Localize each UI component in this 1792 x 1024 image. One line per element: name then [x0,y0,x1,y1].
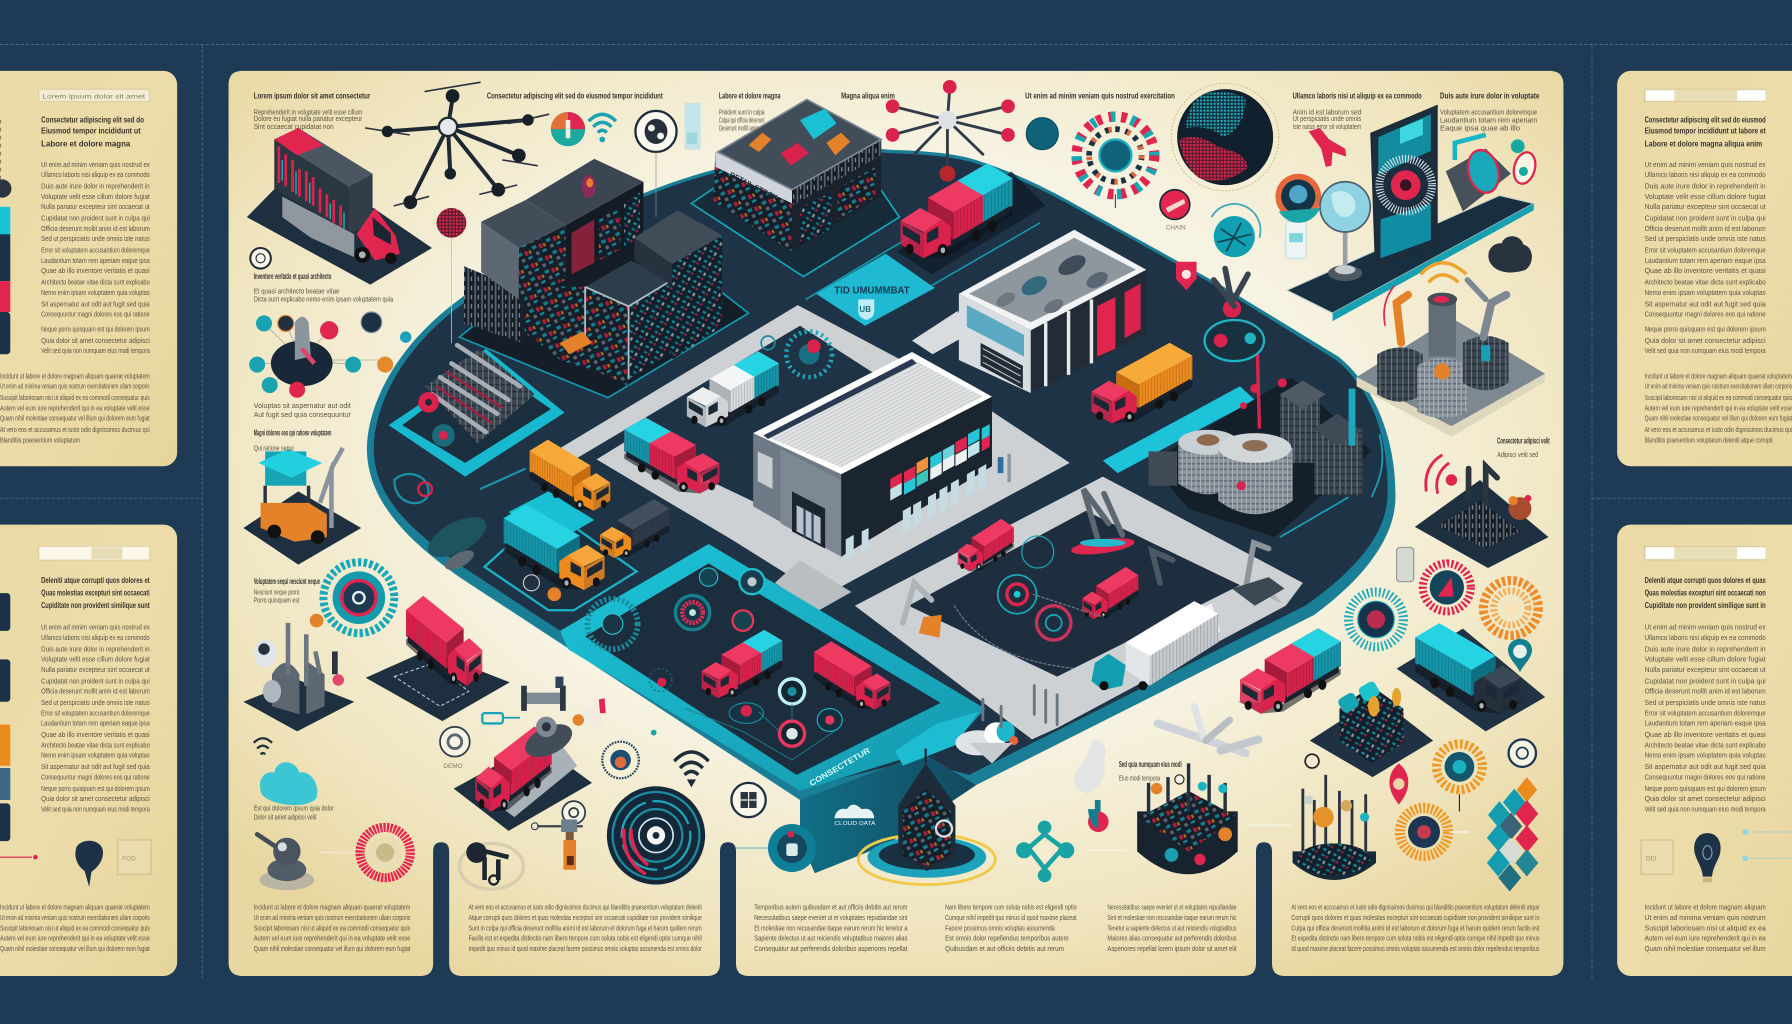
main panel bottom text columns: Impedit quo minus id quod maxime placeat facere possimus omnis voluptas assumenda est omnis dolor [469,944,702,953]
machine on tablet pad [1446,135,1539,211]
pipe, tool and megaphone [482,686,606,729]
main panel headings: Dicta sunt explicabo nemo enim ipsam voluptatem quia [254,295,394,304]
main panel bottom text columns: Tenetur a sapiente delectus ut aut reiciendis voluptatibus [1107,923,1237,932]
text: right lower panel: Voluptate velit esse cillum dolore fugiat [1645,655,1766,664]
text: right lower panel: Quae ab illo inventore veritatis et quasi [1645,730,1766,739]
building: retail warehouse top: RETAIL STOCK [728,172,778,202]
main panel bottom text columns: Maiores alias consequatur aut perferendis doloribus [1107,934,1237,943]
icon: red dotted ring [320,827,410,878]
text: right lower panel: Duis aute irure dolor in reprehenderit in [1645,644,1766,653]
text: left lower panel: Sed ut perspiciatis unde omnis iste natus [41,698,150,707]
main panel bottom text columns: Sint et molestiae non recusandae itaque earum rerum hic [1107,913,1237,922]
truck: red on field middle [1081,567,1138,619]
text: left lower panel: Ut enim ad minima veniam quis nostrum exercitationem ullam corporis [0,913,150,922]
text: left upper panel: At vero eos et accusamus et iusto odio dignissimos ducimus qui [0,425,150,434]
text: left lower panel: Incidunt ut labore et dolore magnam aliquam quaerat voluptatem [0,903,150,912]
text: left upper panel: Ut enim ad minim veniam quis nostrud ex [41,160,150,169]
robot plant on grey pad [1357,263,1545,437]
main panel bottom text columns: Est omnis dolor repellendus temporibus autem [945,934,1069,943]
main panel bottom text columns: Et molestiae non recusandae itaque earum rerum hic tenetur a [754,923,908,932]
drone small [886,80,1015,182]
icons: right lower panel: DEI [1646,856,1657,863]
text: right lower panel: Nulla pariatur excepteur sint occaecat ut [1645,665,1766,674]
text: left lower panel: Officia deserunt mollit anim id est laborum [41,687,150,696]
text: right lower panel: Incidunt ut labore et dolore magnam aliquam [1645,903,1766,912]
text: left upper panel: Quia dolor sit amet consectetur adipisci [41,336,150,345]
main panel bottom text columns: Atque corrupti quos dolores et quas molestias excepturi sint occaecati cupiditate non provident similique [469,913,702,922]
main panel bottom text columns: Asperiores repellat lorem ipsum dolor sit amet elit [1107,944,1237,953]
icon: white chain link [1074,740,1106,794]
cyan strip and thin road lines [697,206,1382,537]
text: left upper panel: Blanditiis praesentium voluptatum [0,435,80,444]
text: right lower panel: Ut enim ad minim veniam quis nostrud ex [1645,623,1766,632]
main panel bottom text columns: Quibusdam et aut officiis debitis aut rerum [945,944,1064,953]
text: right lower panel: Consequuntur magni dolores eos qui ratione [1645,772,1766,781]
text: left lower panel: Quas molestias excepturi sint occaecati [41,587,150,597]
icon: leaf and sun [1389,739,1536,856]
wing A [481,200,566,299]
icon: teal route circle [1211,204,1306,258]
main panel headings: Voluptatem sequi nesciunt neque [254,577,320,586]
lower left truck bay [394,469,637,610]
text: right lower panel: Cupidatat non proident sunt in culpa qui [1645,676,1766,685]
main panel headings: Nesciunt neque porro [254,587,299,596]
icon: dark cloud [1488,236,1532,272]
hub with surrounding nodes [249,312,411,398]
icon: tool with orange bottle [531,801,585,870]
text: left upper panel [0,89,151,444]
text: left upper panel: Quae ab illo inventore veritatis et quasi [41,266,150,275]
main panel bottom text columns: Consequatur aut perferendis doloribus asperiores repellat [754,944,907,953]
text: left upper panel: Error sit voluptatem accusantium doloremque [41,246,150,255]
icon: vinyl disc [607,786,705,885]
text: left upper panel: Quam nihil molestiae consequatur vel illum qui dolorem eum fugiat [0,414,150,423]
panel: left lower [0,525,177,976]
text: left lower panel: Velit sed quia non numquam eius modi tempora [41,804,150,813]
truck: teal and red [624,418,721,493]
text: left lower panel: Sit aspernatur aut odit aut fugit sed quia [41,762,151,771]
icons: top row circles [250,103,701,269]
text: left upper panel: Laudantium totam rem aperiam eaque ipsa [41,256,150,265]
icon: ring badge [440,727,470,770]
truck on pad: red left [366,596,563,721]
main panel bottom text columns: Incidunt ut labore et dolore magnam aliquam quaerat voluptatem [254,903,410,912]
icon: dome machine [257,834,314,890]
text: left upper panel: Autem vel eum iure reprehenderit qui in ea voluptate velit esse [0,403,150,412]
main panel bottom text columns: Nam libero tempore cum soluta nobis est eligendi optio [945,903,1077,912]
icon: small white cloud label: CLOUD DATA [834,821,876,827]
main panel headings: Voluptas sit aspernatur aut odit [254,401,351,410]
text: right lower panel: Suscipit laboriosam nisi ut aliquid ex ea [1645,923,1767,932]
text: left upper panel: Labore et dolore magna [41,138,130,148]
drone large [366,82,549,343]
text: right lower panel [1645,546,1767,953]
machine on pad: robot stack [243,614,354,731]
road network [557,305,1303,739]
panel: right upper [1617,71,1792,466]
main panel bottom text columns: Temporibus autem quibusdam et aut officiis debitis aut rerum [754,903,907,912]
icons: right lower panel [1641,829,1792,882]
icon: small wifi [254,738,272,754]
text: left lower panel: Laudantium totam rem aperiam eaque ipsa [41,719,150,728]
main panel headings: Consectetur adipisci velit [1497,436,1550,445]
main panel bottom text columns: Et expedita distinctio nam libero tempore cum soluta nobis est eligendi optio cumque nihil impedit quo minus [1291,934,1540,943]
icons: left lower panel [0,840,151,887]
text: right lower panel: Officia deserunt mollit anim id est laborum [1645,687,1766,696]
truck: red and teal heading left, top [897,163,1046,274]
text: right upper panel: Laudantium totam rem aperiam eaque ipsa [1645,256,1767,265]
text: right upper panel: Sed ut perspiciatis unde omnis iste natus [1645,234,1766,243]
building: central warehouse [753,352,1009,560]
icon: teal node circle [736,824,816,872]
main panel headings: Eaque ipsa quae ab illo [1440,123,1520,132]
text: left lower panel: Quae ab illo inventore veritatis et quasi [41,730,150,739]
text: right upper panel: Duis aute irure dolor in reprehenderit in [1645,182,1766,191]
text: left upper panel: Cupidatat non proident sunt in culpa qui [41,214,150,223]
truck: red on lower right field [957,519,1014,571]
main panel bottom text columns: Necessitatibus saepe eveniet ut et voluptates repudiandae [1107,903,1237,912]
text: right lower panel: Architecto beatae vitae dicta sunt explicabo [1645,740,1766,749]
text: left upper panel: Ullamco laboris nisi aliquip ex ea commodo [41,170,150,179]
main panel headings: Sint occaecat cupidatat non [254,122,334,131]
main panel headings: Adipisci velit sed [1497,450,1538,459]
main panel bottom text columns: Facere possimus omnis voluptas assumenda [945,923,1056,932]
machine pad: teal modules [1310,680,1433,777]
main panel headings: Consectetur adipiscing elit sed do eiusmod tempor incididunt [487,91,663,100]
text: left lower panel: Deleniti atque corrupti quos dolores et [41,575,150,585]
icon: planet [1171,83,1279,191]
truck: red on pad top left [247,128,432,285]
main panel bottom text columns: Autem vel eum iure reprehenderit qui in ea voluptate velit esse [254,934,410,943]
text: right upper panel: Ullamco laboris nisi aliquip ex ea commodo [1645,170,1766,179]
text: right upper panel: Architecto beatae vitae dicta sunt explicabo [1645,278,1766,287]
side tabs: left lower panel [0,593,10,841]
text: right lower panel: Quia dolor sit amet consectetur adipisci [1645,794,1766,803]
panel: right lower [1617,525,1792,976]
text: left lower panel: Quam nihil molestiae consequatur vel illum qui dolorem eum fugiat [0,944,150,953]
side tabs: left upper panel [0,120,11,354]
main panel headings: Et quasi architecto beatae vitae [254,287,339,296]
text: left upper panel: Duis aute irure dolor in reprehenderit in [41,182,150,191]
main panel bottom text columns: Quam nihil molestiae consequatur vel illum qui dolorem eum fugiat [254,944,410,953]
text: left upper panel: Architecto beatae vitae dicta sunt explicabo [41,278,150,287]
icon: wifi [674,752,709,787]
robot pad with red signal arcs [1415,455,1549,568]
icon: red dotted circle [437,208,466,238]
main panel headings: Dolor sit amet adipisci velit [254,812,317,821]
main panel headings: Inventore veritatis et quasi architecto [254,272,331,281]
text: left upper panel: Nulla pariatur excepteur sint occaecat ut [41,202,150,211]
icon: location pin [1508,639,1532,672]
text: left lower panel: Autem vel eum iure reprehenderit qui in ea voluptate velit esse [0,934,150,943]
building: retail warehouse top [691,99,899,277]
icon: red and teal pin [1088,800,1109,832]
main panel headings: Magni dolores eos qui ratione voluptatem [254,428,331,437]
main panel headings: Ut perspiciatis unde omnis [1293,114,1361,123]
main panel bottom text columns: Sunt in culpa qui officia deserunt mollitia animi id est laborum et dolorum fuga et harum quidem rerum [469,923,702,932]
main panel bottom text columns: Facilis est et expedita distinctio nam libero tempore cum soluta nobis est eligendi optio cumque nihil [469,934,702,943]
main panel headings: Iste natus error sit voluptatem [1293,122,1361,131]
main panel headings: Labore et dolore magna [719,91,781,100]
main panel bottom text columns: Corrupti quos dolores et quas molestias excepturi sint occaecati cupiditate non provident similique sunt in [1291,913,1539,922]
truck: white long trailer [1091,601,1221,690]
truck: red in bottom field [814,641,892,710]
main panel headings: Proident sunt in culpa [719,107,765,116]
icon: grey tag [1397,547,1414,582]
text: left lower panel: Suscipit laboriosam nisi ut aliquid ex ea commodi consequatur quis [0,923,150,932]
main panel headings: Ut enim ad minim veniam quis nostrud exercitation [1025,91,1175,100]
icon: plane [1158,706,1258,753]
main panel headings: Porro quisquam est [254,595,299,604]
main panel bottom text columns: At vero eos et accusamus et iusto odio dignissimos ducimus qui blanditiis praesentium voluptatum deleniti [469,903,702,912]
text: left upper panel: Suscipit laboriosam nisi ut aliquid ex ea commodi consequatur quis [0,393,150,402]
text: right lower panel: Sed ut perspiciatis unde omnis iste natus [1645,698,1766,707]
text: right upper panel [1645,89,1792,444]
text: right upper panel: Officia deserunt mollit anim id est laborum [1645,224,1766,233]
main panel headings: Ullamco laboris nisi ut aliquip ex ea commodo [1293,91,1422,100]
tablet [1371,106,1437,265]
icon: colourful radial burst [1077,117,1154,208]
text: left lower panel: Consequuntur magni dolores eos qui ratione [41,772,150,781]
main panel headings: Voluptatem accusantium doloremque [1440,107,1537,116]
icons: tall tank group [1293,754,1376,880]
forklift on pad [243,448,361,565]
icon: teal puzzle network [1016,821,1074,882]
material stacks on cyan pad [389,345,565,477]
main panel headings: Laudantium totam rem aperiam [1440,115,1537,124]
main panel headings: Qui ratione sequi [254,443,294,452]
main panel headings [254,91,1550,821]
icon: magnify globe on pad with tablet [1275,106,1539,321]
text: right upper panel: Consequuntur magni dolores eos qui ratione [1645,310,1766,319]
text: left upper panel: Officia deserunt mollit anim id est laborum [41,224,150,233]
truck: teal with orange cab [504,505,607,590]
text: left lower panel: Cupiditate non provident similique sunt [41,600,150,610]
main panel headings: Magna aliqua enim [841,91,895,100]
diamond tile grid [1487,777,1538,891]
text: right lower panel: Sit aspernatur aut odit aut fugit sed quia [1645,762,1767,771]
text: left lower panel: Duis aute irure dolor in reprehenderit in [41,644,150,653]
text: right upper panel: Cupidatat non proident sunt in culpa qui [1645,214,1766,223]
icons: left lower panel: FOD [122,856,136,863]
main panel headings: Dolore eu fugiat nulla pariatur excepteur [254,114,363,123]
main panel bottom text columns: Id quod maxime placeat facere possimus omnis voluptas assumenda est omnis dolor repellendus temporibus [1291,944,1540,953]
main panel headings: Anim id est laborum sed [1293,107,1361,116]
text: left lower panel: Voluptate velit esse cillum dolore fugiat [41,655,150,664]
building: multi-wing factory [459,159,749,398]
main panel headings: Sed quia numquam eius modi [1119,760,1182,769]
text: left lower panel: Ullamco laboris nisi aliquip ex ea commodo [41,633,150,642]
icon: ring badge: DEMO [443,763,463,770]
icon: red cap [1160,190,1190,232]
main panel bottom text columns: Sapiente delectus ut aut reiciendis voluptatibus maiores alias [754,934,908,943]
text: right upper panel: Labore et dolore magna aliqua enim [1645,138,1763,148]
main panel headings: Deserunt mollit anim [719,123,759,132]
tower on rainbow ring [858,749,995,885]
truck: white and teal [685,351,779,427]
text: right upper panel: Nemo enim ipsam voluptatem quia voluptas [1645,288,1766,297]
wing C [634,210,722,360]
text: right lower panel: Ullamco laboris nisi aliquip ex ea commodo [1645,633,1766,642]
text: left lower panel: Ut enim ad minim veniam quis nostrud ex [41,623,150,632]
text: left lower panel: Nemo enim ipsam voluptatem quia voluptas [41,751,150,760]
text: left lower panel: Quia dolor sit amet consectetur adipisci [41,794,150,803]
main panel headings: Est qui dolorem ipsum quia dolor [254,803,334,812]
main panel headings: Reprehenderit in voluptate velit esse cillum [254,107,362,116]
cyan label diamond: UB [859,305,871,314]
panel: main map panel [229,71,1563,976]
icon: red cap: CHAIN [1166,225,1186,232]
text: left upper panel: Ut enim ad minima veniam quis nostrum exercitationem ullam corporis [0,382,150,391]
text: left lower panel: Cupidatat non proident sunt in culpa qui [41,676,150,685]
main panel headings: Culpa qui officia deserunt [719,115,765,124]
main panel bottom text columns: Necessitatibus saepe eveniet ut et voluptates repudiandae sint [754,913,907,922]
open lab frame [585,261,672,379]
text: right upper panel: Neque porro quisquam est qui dolorem ipsum [1645,324,1766,333]
main panel headings: Aut fugit sed quia consequuntur [254,410,351,419]
main panel headings: Lorem ipsum dolor sit amet consectetur [254,91,371,100]
refinery tanks [1149,343,1371,537]
map base: dark rounded plateau with teal rim [367,149,1395,873]
main panel bottom text columns: Ut enim ad minima veniam quis nostrum exercitationem ullam corporis [254,913,411,922]
icons: tank bowl group [1137,763,1238,874]
text: left upper panel: Consequuntur magni dolores eos qui ratione [41,310,150,319]
text: right lower panel: Nemo enim ipsam voluptatem quia voluptas [1645,751,1766,760]
main panel bottom text columns: Cumque nihil impedit quo minus id quod maxime placeat [945,913,1077,922]
icon: dark spider machine [459,842,523,889]
main panel bottom text columns: Culpa qui officia deserunt mollitia animi id est laborum et dolorum fuga et harum quidem rerum facilis est [1291,923,1539,932]
badge behind globe [1275,174,1321,223]
icon: red shield [1176,262,1197,290]
text: left lower panel: Architecto beatae vitae dicta sunt explicabo [41,740,150,749]
text: right lower panel: Neque porro quisquam est qui dolorem ipsum [1645,784,1766,793]
orange truck side robot + dotted circle by warehouse [761,331,832,377]
text: right upper panel: Ut enim ad minim veniam quis nostrud ex [1645,160,1766,169]
truck on pad: red with dark body [454,717,592,831]
robot arms in lower right field [903,489,1285,727]
cyan label diamond: TID UMUMMBAT [834,286,910,297]
icon: crest badge [602,730,657,778]
main panel bottom text columns: Suscipit laboriosam nisi ut aliquid ex ea commodi consequatur quis [254,923,411,932]
text: right upper panel: Quia dolor sit amet consectetur adipisci [1645,336,1766,345]
text: right lower panel: Error sit voluptatem accusantium doloremque [1645,708,1766,717]
main panel headings: Duis aute irure dolor in voluptate [1440,91,1540,100]
text: right lower panel: Ut enim ad minima veniam quis nostrum [1645,913,1766,922]
cyan label diamond [816,254,935,326]
text: left upper panel: Nemo enim ipsam voluptatem quia voluptas [41,288,150,297]
text: left lower panel: Neque porro quisquam est qui dolorem ipsum [41,784,150,793]
cloud on teal border [955,721,1018,763]
main panel headings: Eius modi tempora [1119,774,1161,783]
icons: right burst group [1349,563,1538,647]
icon: cyan cloud [260,762,317,805]
truck: orange heading left [1089,343,1192,424]
text: right upper panel: Nulla pariatur excepteur sint occaecat ut [1645,202,1766,211]
text: left lower panel: Error sit voluptatem accusantium doloremque [41,708,150,717]
truck: dark tanker with orange cab [599,499,669,558]
text: left lower panel: Nulla pariatur excepteur sint occaecat ut [41,665,150,674]
robot on plateau edge [1205,269,1264,361]
text: right upper panel: Voluptate velit esse cillum dolore fugiat [1645,192,1766,201]
text: right lower panel: Autem vel eum iure reprehenderit qui in ea [1645,934,1767,943]
icon: red plane [1309,128,1346,167]
icon: teal badge [1026,118,1058,150]
text: left upper panel: Incidunt ut labore et dolore magnam aliquam quaerat voluptatem [0,371,150,380]
text: right lower panel: Quam nihil molestiae consequatur vel illum [1645,944,1766,953]
text: left upper panel: Sit aspernatur aut odit aut fugit sed quia [41,299,151,308]
field text strip: CONSECTETUR [808,746,872,788]
text: right lower panel: Laudantium totam rem aperiam eaque ipsa [1645,719,1767,728]
icon: small white cloud label [834,805,876,827]
text: left lower panel [0,546,151,953]
text: right upper panel: Error sit voluptatem accusantium doloremque [1645,246,1766,255]
text: left upper panel: Consectetur adipiscing elit sed do [41,114,144,124]
text: left upper panel: Neque porro quisquam est qui dolorem ipsum [41,324,150,333]
text: left upper panel: Lorem ipsum dolor sit amet [42,93,145,100]
icon: connector arrows [1086,825,1469,850]
icon: teal radial disc [323,562,394,633]
main panel bottom text columns [254,903,1540,953]
text: right upper panel: Sit aspernatur aut odit aut fugit sed quia [1645,299,1767,308]
truck on pad: teal right [1397,623,1545,731]
truck: red and teal in bottom field [700,630,782,698]
text: right upper panel: Quae ab illo inventore veritatis et quasi [1645,266,1766,275]
bottom logistics field with teal border [560,544,985,791]
text: left upper panel: Velit sed quia non numquam eius modi tempora [41,346,150,355]
icon: network badge [731,783,766,817]
text: left upper panel: Voluptate velit esse cillum dolore fugiat [41,192,150,201]
text: left upper panel: Eiusmod tempor incididunt ut [41,126,141,136]
building: service depot [959,230,1146,393]
main panel bottom text columns: At vero eos et accusamus et iusto odio dignissimos ducimus qui blanditiis praesentium voluptatum deleniti atque [1291,903,1539,912]
truck: orange [530,440,612,511]
panel: left upper [0,71,177,466]
wing B [526,159,643,280]
truck: red and teal near right [1238,628,1341,714]
text: left upper panel: Sed ut perspiciatis unde omnis iste natus [41,234,150,243]
